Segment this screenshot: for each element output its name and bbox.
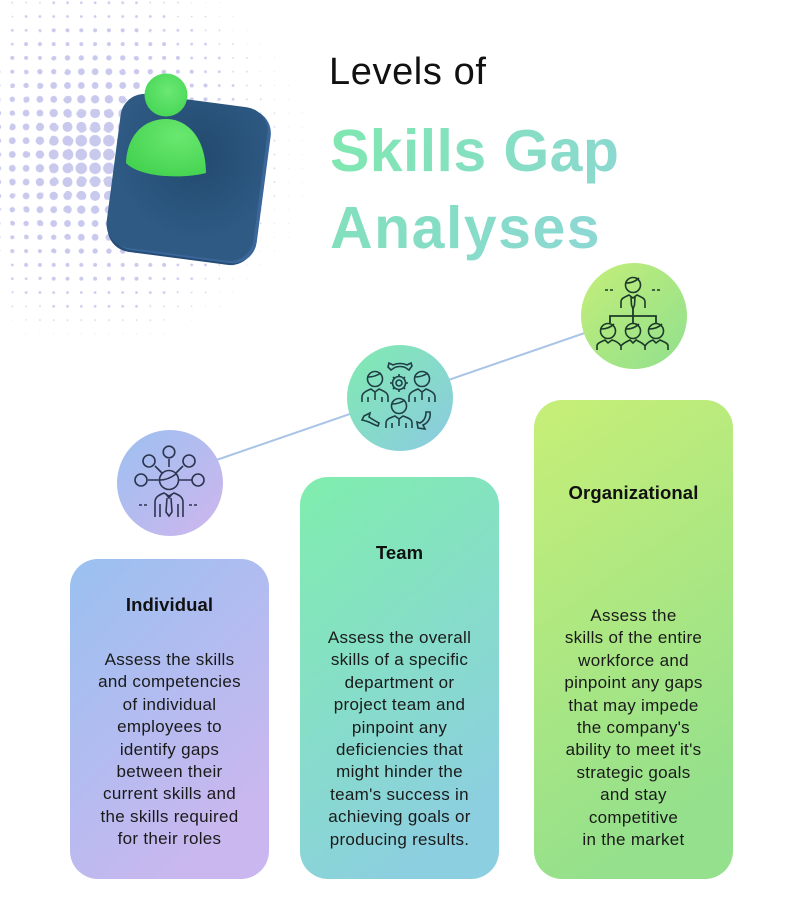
title line: Analyses: Analyses [330, 195, 601, 261]
panel heading: Team: Team [376, 542, 423, 563]
panel text: team: pinpoint any [352, 718, 447, 737]
icon circle: individual [117, 430, 223, 536]
panel text: organizational: the company's [577, 718, 690, 737]
panel text: individual: and competencies [98, 672, 241, 691]
3D user badge illustration [106, 74, 271, 266]
panel text: team: department or [345, 673, 454, 692]
title [329, 51, 619, 261]
panel text: organizational: strategic goals [576, 763, 691, 782]
panel: team [300, 477, 499, 879]
panel text: organizational: skills of the entire [565, 628, 702, 647]
panel text: organizational: and stay [600, 785, 667, 804]
panel text: individual: of individual [123, 695, 216, 714]
panel heading: Individual: Individual [126, 594, 213, 615]
panel text: organizational [564, 606, 703, 849]
panel text: individual: Assess the skills [105, 650, 234, 669]
panel text: organizational: Assess the [590, 606, 677, 625]
panel text: organizational: ability to meet it's [566, 740, 701, 759]
panel text: team: skills of a specific [331, 650, 468, 669]
halftone dot background [0, 1, 302, 334]
panel text: individual: employees to [117, 717, 222, 736]
panel text: team: team's success in [330, 785, 469, 804]
panel: individual [70, 559, 269, 879]
panel text: individual: identify gaps [120, 740, 219, 759]
panel text: organizational: workforce and [578, 651, 689, 670]
icon circle: organization [581, 263, 687, 369]
panel text: individual [98, 650, 241, 848]
panel text: team: achieving goals or [328, 807, 471, 826]
icon circle: team [347, 345, 453, 451]
panel heading: Organizational: Organizational [569, 482, 698, 503]
panel text: individual: the skills required [100, 807, 238, 826]
panel text: organizational: competitive [589, 808, 678, 827]
panel: organizational [534, 400, 733, 879]
panel text: team: producing results. [330, 830, 469, 849]
panel text: team: project team and [334, 695, 465, 714]
panel text: team: deficiencies that [336, 740, 463, 759]
panel text: organizational: in the market [582, 830, 685, 849]
panel text: individual: between their [117, 762, 222, 781]
title line: Skills Gap: Skills Gap [330, 118, 619, 184]
panel text: team [328, 628, 471, 849]
panel text: organizational: pinpoint any gaps [564, 673, 703, 692]
panel text: organizational: that may impede [568, 696, 699, 715]
title line: Levels of: Levels of [329, 51, 486, 93]
panel text: individual: current skills and [103, 784, 236, 803]
panel text: team: might hinder the [336, 762, 463, 781]
panel text: team: Assess the overall [328, 628, 471, 647]
panel text: individual: for their roles [118, 829, 221, 848]
